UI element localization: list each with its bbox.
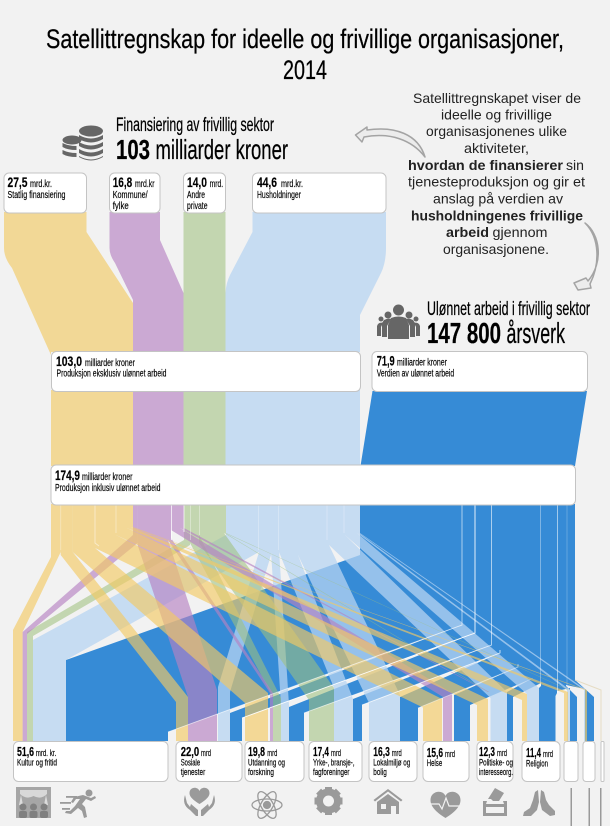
intro text block: husholdningenes frivillige (411, 208, 583, 224)
source box: municipal funding: fylke (113, 201, 129, 212)
source box: households: Husholdninger (257, 190, 301, 201)
arrow: to financing (356, 127, 425, 157)
activity box: local environment and housing: 16,3 (373, 744, 390, 759)
intro text block: ideelle og frivillige (441, 106, 552, 122)
box: production excluding unpaid work: milliarder kroner (85, 358, 135, 369)
source box: municipal funding: mrd.kr (135, 179, 155, 190)
activity box: religion: Religion (526, 758, 548, 770)
activity box: political and interest organisations: mrd (497, 748, 507, 759)
activity box: education and research (245, 742, 304, 782)
source box: households (252, 173, 386, 213)
title (46, 24, 564, 85)
sankey: flows from total production to activities (13, 504, 601, 741)
flow: municipal funding (110, 212, 184, 352)
activity box: local environment and housing (369, 742, 417, 782)
flow: faint remainder outline (575, 680, 601, 741)
flow: state funding (4, 212, 133, 355)
box: value of unpaid work: milliarder kroner (397, 358, 447, 368)
activity box: health: mrd (445, 749, 455, 760)
flow: other private funding (184, 212, 226, 352)
heading: financing (116, 115, 288, 165)
heading: unpaid work: årsverk (506, 318, 565, 350)
flow edge lines (61, 505, 567, 732)
intro text block: anslag på verdien av (433, 190, 563, 206)
activity box: education and research: mrd (267, 748, 277, 759)
flow: household funding (226, 212, 386, 352)
activity box: education and research: 19,8 (248, 744, 265, 759)
activity box: social services (176, 742, 242, 782)
source box: state funding: Statlig finansiering (8, 190, 66, 201)
heading: financing: Finansiering av frivillig sektor (116, 115, 274, 136)
activity box: political and interest organisations (477, 742, 513, 782)
source box: state funding: mrd.kr. (30, 179, 52, 190)
icon: praying hands (523, 790, 555, 816)
intro text block: Satellittregnskapet viser de (413, 90, 581, 106)
title: 2014 (283, 55, 327, 85)
intro text block: hvordan de finansierer (408, 157, 564, 173)
source box: other private funding: Andre (187, 190, 205, 201)
activity box: education and research: Utdanning og (248, 758, 285, 768)
activity box: small category 3 (601, 742, 604, 782)
box: production including unpaid work: milliarder kroner (82, 472, 133, 483)
activity box: religion: 11,4 (526, 745, 541, 760)
activity box: health: Helse (427, 758, 442, 769)
intro text block: gjennom (492, 224, 548, 240)
icon: heart in hands (184, 788, 215, 816)
activity box: trade associations: fagforeninger (313, 767, 350, 778)
intro text block: arbeid (446, 224, 489, 240)
source box: households: 44,6 (257, 174, 277, 190)
activity box: political and interest organisations: 12,3 (479, 744, 495, 759)
icon: runner (60, 790, 96, 818)
flows: municipal funding (23, 504, 489, 741)
box: production excluding unpaid work: 103,0 (56, 353, 82, 369)
icon: atom (252, 789, 282, 821)
source box: state funding (4, 173, 86, 213)
icon: ballot box (483, 788, 507, 816)
box: value of unpaid work: Verdien av ulønnet arbeid (377, 368, 454, 380)
flows: state funding (13, 504, 587, 741)
activity box: culture and leisure (14, 742, 168, 782)
activity box: social services: tjenester (181, 767, 205, 778)
heading: financing: milliarder kroner (156, 134, 288, 165)
intro text block: organisasjonenes ulike (426, 123, 567, 139)
flows: other private funding (27, 504, 569, 741)
source box: municipal funding: Kommune/ (113, 190, 148, 201)
activity box: local environment and housing: Lokalmiljø og (373, 758, 410, 768)
heading: unpaid work: 147 800 (427, 318, 501, 350)
source box: state funding: 27,5 (8, 174, 28, 190)
activity box: small category 2 (583, 742, 595, 782)
intro text block (408, 90, 585, 257)
arrow: to unpaid work (574, 223, 598, 290)
flow: financing sources into production (4, 212, 386, 355)
activity box: small category 1 (564, 742, 578, 782)
heading: unpaid work (427, 299, 590, 350)
box: production including unpaid work (51, 465, 576, 505)
intro text block: tjenesteproduksjon og gir et (408, 174, 585, 190)
source box: other private funding: mrd. (210, 179, 223, 190)
activity box: culture and leisure: mrd. kr. (36, 748, 56, 759)
flows: household funding (33, 504, 585, 741)
activity box: local environment and housing: bolig (373, 767, 387, 778)
source box: other private funding: 14,0 (187, 174, 207, 190)
icon: cut-off category bars (570, 788, 602, 826)
source box: municipal funding: 16,8 (113, 174, 132, 190)
icon: coins (62, 126, 103, 160)
activity box: social services: mrd (201, 748, 211, 759)
flow: production band to total (51, 390, 360, 466)
icon: house (374, 789, 402, 814)
source box: municipal funding (110, 173, 160, 213)
icon: people (377, 304, 420, 339)
icon: stage and audience (16, 787, 51, 818)
activity box: trade associations: mrd (331, 748, 341, 759)
icon: gear (314, 787, 342, 815)
activity box: trade associations: 17,4 (313, 744, 329, 759)
activity box: trade associations (309, 742, 362, 782)
activity box: culture and leisure: 51,6 (17, 744, 34, 759)
intro text block: aktiviteter, (464, 140, 529, 156)
activity box: political and interest organisations: Politiske- og (479, 758, 513, 768)
activity box: trade associations: Yrke-, bransje-, (313, 758, 354, 768)
activity box: education and research: forskning (248, 767, 274, 778)
box: production excluding unpaid work: Produksjon eksklusiv ulønnet arbeid (56, 368, 166, 380)
flows: unpaid work (66, 504, 594, 741)
activity box: culture and leisure: Kultur og fritid (17, 758, 57, 768)
box: production including unpaid work: Produksjon inklusiv ulønnet arbeid (55, 483, 160, 494)
activity box: religion: mrd (543, 749, 553, 760)
source box: households: mrd.kr. (281, 179, 303, 190)
intro text block: organisasjonene. (443, 241, 549, 257)
icon: heart with pulse (430, 792, 460, 818)
activity box: social services: 22,0 (181, 744, 199, 759)
intro text block: sin (566, 157, 584, 173)
flow: unpaid work to total (360, 391, 587, 466)
activity box: health (423, 742, 469, 782)
activity box: social services: Sosiale (181, 758, 200, 768)
activity box: health: 15,6 (427, 745, 443, 760)
source box: other private funding: private (187, 201, 208, 212)
box: value of unpaid work (372, 352, 588, 392)
box: production including unpaid work: 174,9 (55, 467, 80, 483)
box: production excluding unpaid work (52, 352, 360, 392)
source box: other private funding (184, 173, 226, 213)
heading: financing: 103 (116, 134, 150, 165)
activity box: political and interest organisations: interesseorg. (479, 767, 513, 778)
box: value of unpaid work: 71,9 (377, 352, 395, 368)
activity box: local environment and housing: mrd (392, 748, 402, 759)
activity box: religion (522, 742, 560, 782)
